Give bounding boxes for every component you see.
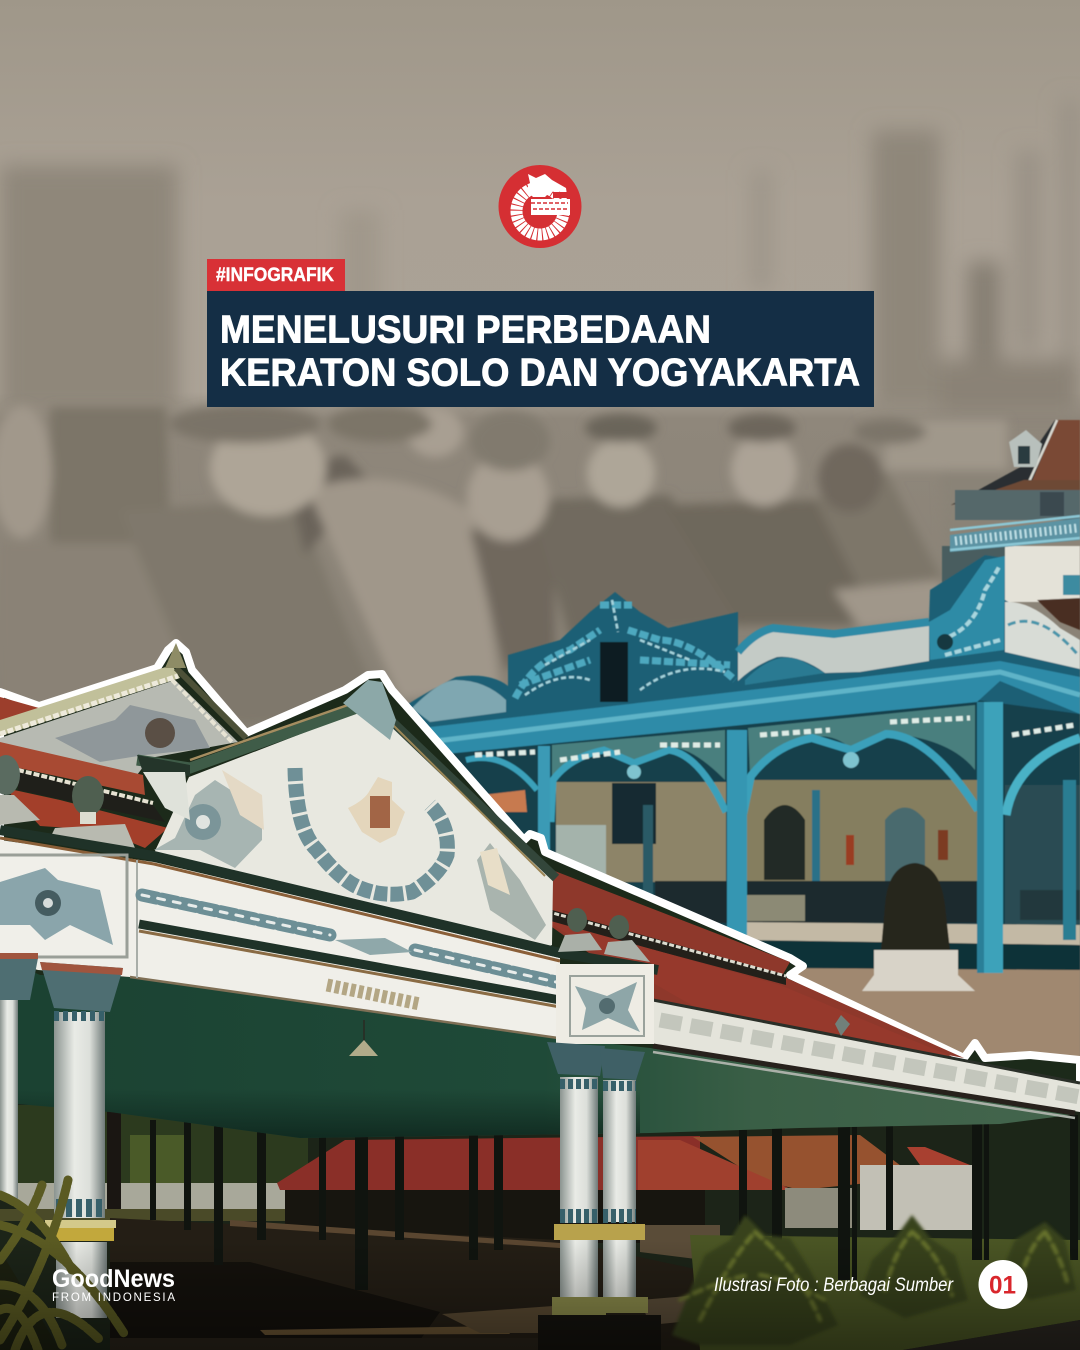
pavilion walls [482, 780, 1080, 925]
red roof behind main gable, right [534, 868, 964, 1060]
javanese inscription plaque [327, 985, 420, 1004]
blue columns [538, 702, 1076, 973]
tag: #INFOGRAFIK: #INFOGRAFIK [216, 265, 334, 286]
page number badge [978, 1260, 1028, 1309]
facade [0, 840, 560, 1038]
title block: KERATON SOLO DAN YOGYAKARTA [220, 352, 860, 394]
pavilion carved crest [405, 555, 1080, 1000]
pier finials [567, 908, 587, 932]
dark slender pillars [150, 1065, 1078, 1290]
far scene below canopy [0, 1100, 1080, 1350]
blue Solo pavilion [405, 420, 1080, 1062]
faded palace columns [0, 100, 1080, 415]
central ornament [515, 600, 735, 698]
right wave [738, 624, 929, 681]
grass [690, 1235, 1080, 1350]
dark reflecting floor [110, 1218, 780, 1350]
column left edge [0, 953, 38, 1200]
wainscot [655, 881, 980, 923]
wreath relief [295, 768, 447, 894]
canopy ceiling [18, 965, 1070, 1138]
roof finials [72, 776, 104, 816]
white cut-out outline [0, 643, 1080, 1350]
carved arches [466, 705, 1080, 822]
dark shaded road [110, 1262, 440, 1340]
pavilion tower [942, 420, 1080, 630]
shrubs [672, 1215, 1076, 1345]
red roof bands [0, 742, 145, 795]
cornice lines [0, 830, 658, 1038]
left wave [412, 680, 506, 722]
logo: red circle with eagle G [498, 165, 582, 248]
white frieze receding to right [653, 1000, 1080, 1118]
seated crowd of men [0, 405, 1010, 725]
pavement right of pair [640, 1225, 720, 1262]
brand: GoodNews from Indonesia [52, 1265, 175, 1304]
garuda wing reliefs [143, 770, 546, 940]
far red roof [482, 790, 527, 812]
trees and garden wall [18, 1105, 308, 1185]
distant gable, rear left [0, 643, 246, 848]
headcloths [170, 405, 320, 443]
column pair [538, 1042, 661, 1350]
white fluted columns [0, 953, 661, 1350]
crest emblem [348, 777, 405, 843]
balcony railing [950, 518, 1080, 552]
white scroll [1005, 602, 1080, 669]
faces [0, 406, 52, 538]
under roof hall [285, 1188, 705, 1243]
bottom shading [0, 1240, 1080, 1350]
gable fascia [0, 665, 180, 736]
pavilion main beam [422, 661, 1080, 755]
dark window and door shapes [556, 825, 606, 883]
page number badge: 01 [989, 1272, 1016, 1300]
statue on pedestal [862, 863, 975, 991]
brand: GoodNews from Indonesia: FROM INDONESIA [52, 1292, 175, 1304]
main gable wall [154, 708, 553, 950]
title block: MENELUSURI PERBEDAAN [220, 308, 711, 352]
gable cornices [137, 680, 556, 878]
left palm fronds [0, 1180, 125, 1350]
distant red roofs [277, 1136, 700, 1190]
left panel flower relief [0, 855, 127, 957]
wall hangings [846, 835, 854, 865]
tag: #INFOGRAFIK [207, 259, 345, 291]
carved frieze [142, 895, 556, 982]
dragon ornament [929, 556, 1005, 660]
lizard relief [335, 938, 412, 955]
photo credit: Ilustrasi Foto : Berbagai Sumber [714, 1275, 954, 1296]
pavilion dark interior [435, 700, 1080, 935]
column 1 [40, 962, 123, 1318]
hanging lamp [349, 1020, 378, 1056]
pavilion floor [730, 922, 1080, 1062]
gable relief [55, 705, 210, 762]
brand: GoodNews from Indonesia: GoodNews [52, 1265, 175, 1293]
title block [207, 291, 874, 407]
right pier with relief [556, 908, 654, 1044]
